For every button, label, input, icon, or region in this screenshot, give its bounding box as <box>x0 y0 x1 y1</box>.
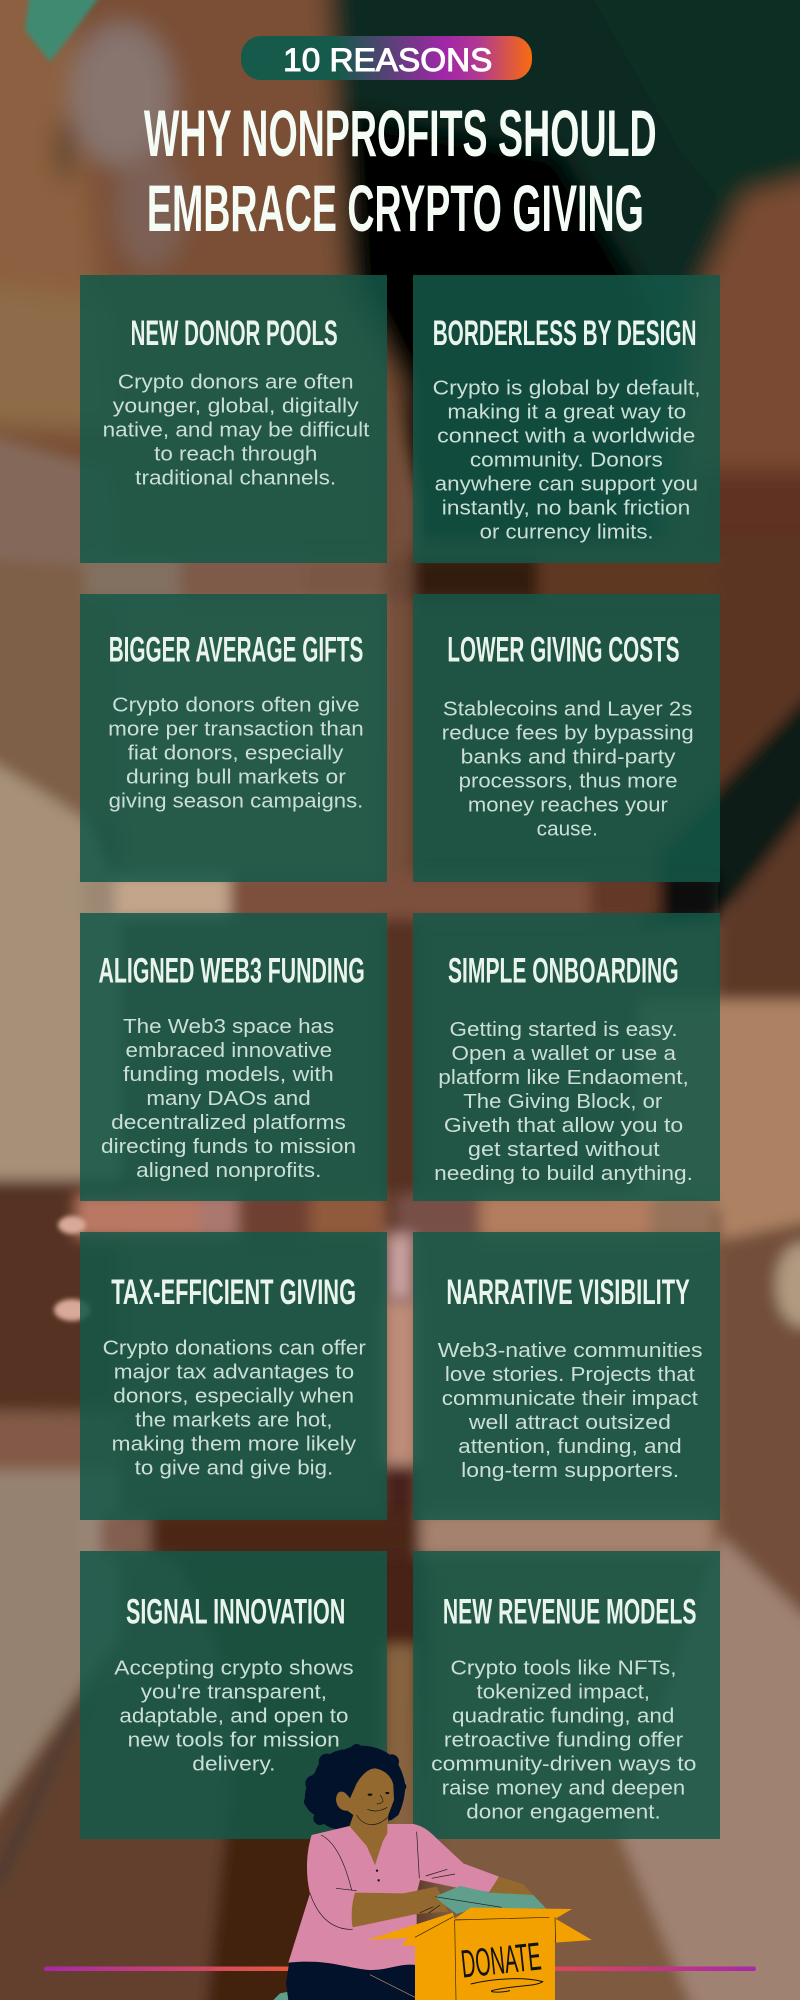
panel: aligned web3 funding: many DAOs and <box>146 1087 311 1110</box>
panel: new revenue models <box>413 1551 720 1839</box>
panel: narrative visibility: well attract outsized <box>468 1411 671 1434</box>
panel: tax-efficient giving: the markets are hot, <box>135 1408 333 1432</box>
panel: aligned web3 funding: ALIGNED WEB3 FUNDING <box>98 951 365 991</box>
panel: borderless by design: Crypto is global by default, <box>433 376 701 400</box>
panel: signal innovation: delivery. <box>192 1752 276 1776</box>
icon: face and neck <box>336 1768 394 1865</box>
panel: tax-efficient giving: major tax advantages to <box>114 1360 354 1384</box>
panel: signal innovation: new tools for mission <box>128 1728 340 1752</box>
icon: hair <box>304 1744 406 1829</box>
panel: tax-efficient giving: to give and give big. <box>135 1456 333 1480</box>
icon: donation box <box>367 1908 592 2000</box>
panel: new revenue models: tokenized impact, <box>476 1680 650 1704</box>
panel: narrative visibility: communicate their impact <box>442 1387 698 1410</box>
panel: new revenue models: donor engagement. <box>466 1800 661 1824</box>
panel: new donor pools: to reach through <box>154 442 317 466</box>
panel: narrative visibility: love stories. Projects that <box>445 1363 695 1386</box>
panel: signal innovation: you're transparent, <box>141 1680 327 1704</box>
icon: left forearm <box>352 1887 448 1927</box>
panel: tax-efficient giving: TAX-EFFICIENT GIVING <box>111 1272 356 1312</box>
panel: new donor pools <box>80 275 387 563</box>
panel: bigger average gifts: during bull markets or <box>126 766 346 789</box>
panel: lower giving costs: money reaches your <box>468 794 668 817</box>
panel: signal innovation <box>80 1551 387 1839</box>
icon: right forearm <box>489 1877 534 1896</box>
panel: aligned web3 funding <box>80 913 387 1201</box>
panel: simple onboarding: needing to build anything. <box>434 1162 693 1185</box>
panel: aligned web3 funding: decentralized platforms <box>111 1111 346 1134</box>
panel: simple onboarding: Getting started is easy. <box>450 1018 678 1041</box>
panel: borderless by design: anywhere can support you <box>435 472 698 496</box>
panel: lower giving costs: Stablecoins and Layer 2s <box>443 698 692 721</box>
panel: simple onboarding: The Giving Block, or <box>463 1090 662 1113</box>
panel: tax-efficient giving: donors, especially when <box>113 1384 354 1408</box>
panel: narrative visibility: Web3-native communities <box>438 1339 703 1362</box>
icon: trousers <box>286 1962 417 2000</box>
panel: simple onboarding <box>413 913 720 1201</box>
icon: eyes and buttons <box>368 1792 389 1881</box>
panel: borderless by design: community. Donors <box>470 448 663 472</box>
panel: aligned web3 funding: directing funds to mission <box>101 1135 356 1158</box>
panel: narrative visibility <box>413 1232 720 1520</box>
panel: aligned web3 funding: funding models, with <box>123 1063 334 1086</box>
badge: 10 reasons <box>241 36 532 80</box>
panel: lower giving costs: banks and third-party <box>461 746 676 769</box>
icon: teal cloth <box>435 1886 546 1914</box>
panel: simple onboarding: Open a wallet or use a <box>452 1042 677 1065</box>
panel: signal innovation: adaptable, and open to <box>119 1704 349 1728</box>
panel: new revenue models: quadratic funding, and <box>452 1704 674 1728</box>
panel: signal innovation: SIGNAL INNOVATION <box>126 1592 345 1632</box>
panel: new donor pools: traditional channels. <box>135 466 336 490</box>
panel: new donor pools: native, and may be difficult <box>103 418 370 442</box>
panel: simple onboarding: platform like Endaoment, <box>438 1066 689 1089</box>
panel: tax-efficient giving: making them more likely <box>112 1432 357 1456</box>
panel: bigger average gifts <box>80 594 387 882</box>
panel: simple onboarding: Giveth that allow you to <box>444 1114 683 1137</box>
panel: lower giving costs <box>413 594 720 882</box>
panel: new revenue models: retroactive funding offer <box>444 1728 683 1752</box>
icon: teal cloth by leg <box>273 1992 288 2000</box>
gradient rule <box>44 1966 756 1971</box>
panel: borderless by design: connect with a worldwide <box>437 424 695 448</box>
panel: tax-efficient giving <box>80 1232 387 1520</box>
panel: borderless by design <box>413 275 720 563</box>
panel: bigger average gifts: Crypto donors often give <box>112 694 360 717</box>
panel: borderless by design: instantly, no bank friction <box>442 496 690 520</box>
panel: new donor pools: NEW DONOR POOLS <box>131 313 338 353</box>
panel: new revenue models: raise money and deepen <box>442 1776 685 1800</box>
panel: tax-efficient giving: Crypto donations can offer <box>103 1336 366 1360</box>
panel: borderless by design: making it a great way to <box>447 400 686 424</box>
panel: new donor pools: Crypto donors are often <box>118 370 354 394</box>
icon: shirt and face lines <box>310 1795 502 1929</box>
panel: narrative visibility: attention, funding, and <box>458 1435 682 1458</box>
icon: pink shirt <box>288 1824 499 1970</box>
panel: bigger average gifts: more per transaction than <box>108 718 364 741</box>
title <box>144 97 657 245</box>
panel: bigger average gifts: giving season campaigns. <box>109 790 363 813</box>
panel: lower giving costs: cause. <box>537 818 598 841</box>
text: donate: DONATE <box>459 1934 543 1987</box>
badge: 10 reasons: 10 REASONS <box>283 42 492 78</box>
panel: lower giving costs: processors, thus more <box>459 770 678 793</box>
panel: bigger average gifts: fiat donors, especially <box>128 742 344 765</box>
panel: new revenue models: community-driven ways to <box>431 1752 696 1776</box>
panel: aligned web3 funding: The Web3 space has <box>123 1015 334 1038</box>
panel: new donor pools: younger, global, digitally <box>113 394 360 418</box>
panel: borderless by design: or currency limits. <box>480 520 654 544</box>
panel: new revenue models: Crypto tools like NFTs, <box>450 1656 676 1680</box>
illustration: woman packing a donation box <box>273 1744 592 2000</box>
panel: simple onboarding: get started without <box>468 1138 660 1161</box>
panel: signal innovation: Accepting crypto shows <box>114 1656 354 1680</box>
panel: narrative visibility: long-term supporters. <box>461 1459 679 1482</box>
panel: aligned web3 funding: aligned nonprofits. <box>136 1159 321 1182</box>
panel: lower giving costs: reduce fees by bypassing <box>442 722 694 745</box>
panel: bigger average gifts: BIGGER AVERAGE GIFTS <box>109 630 363 670</box>
panel: aligned web3 funding: embraced innovative <box>126 1039 332 1062</box>
